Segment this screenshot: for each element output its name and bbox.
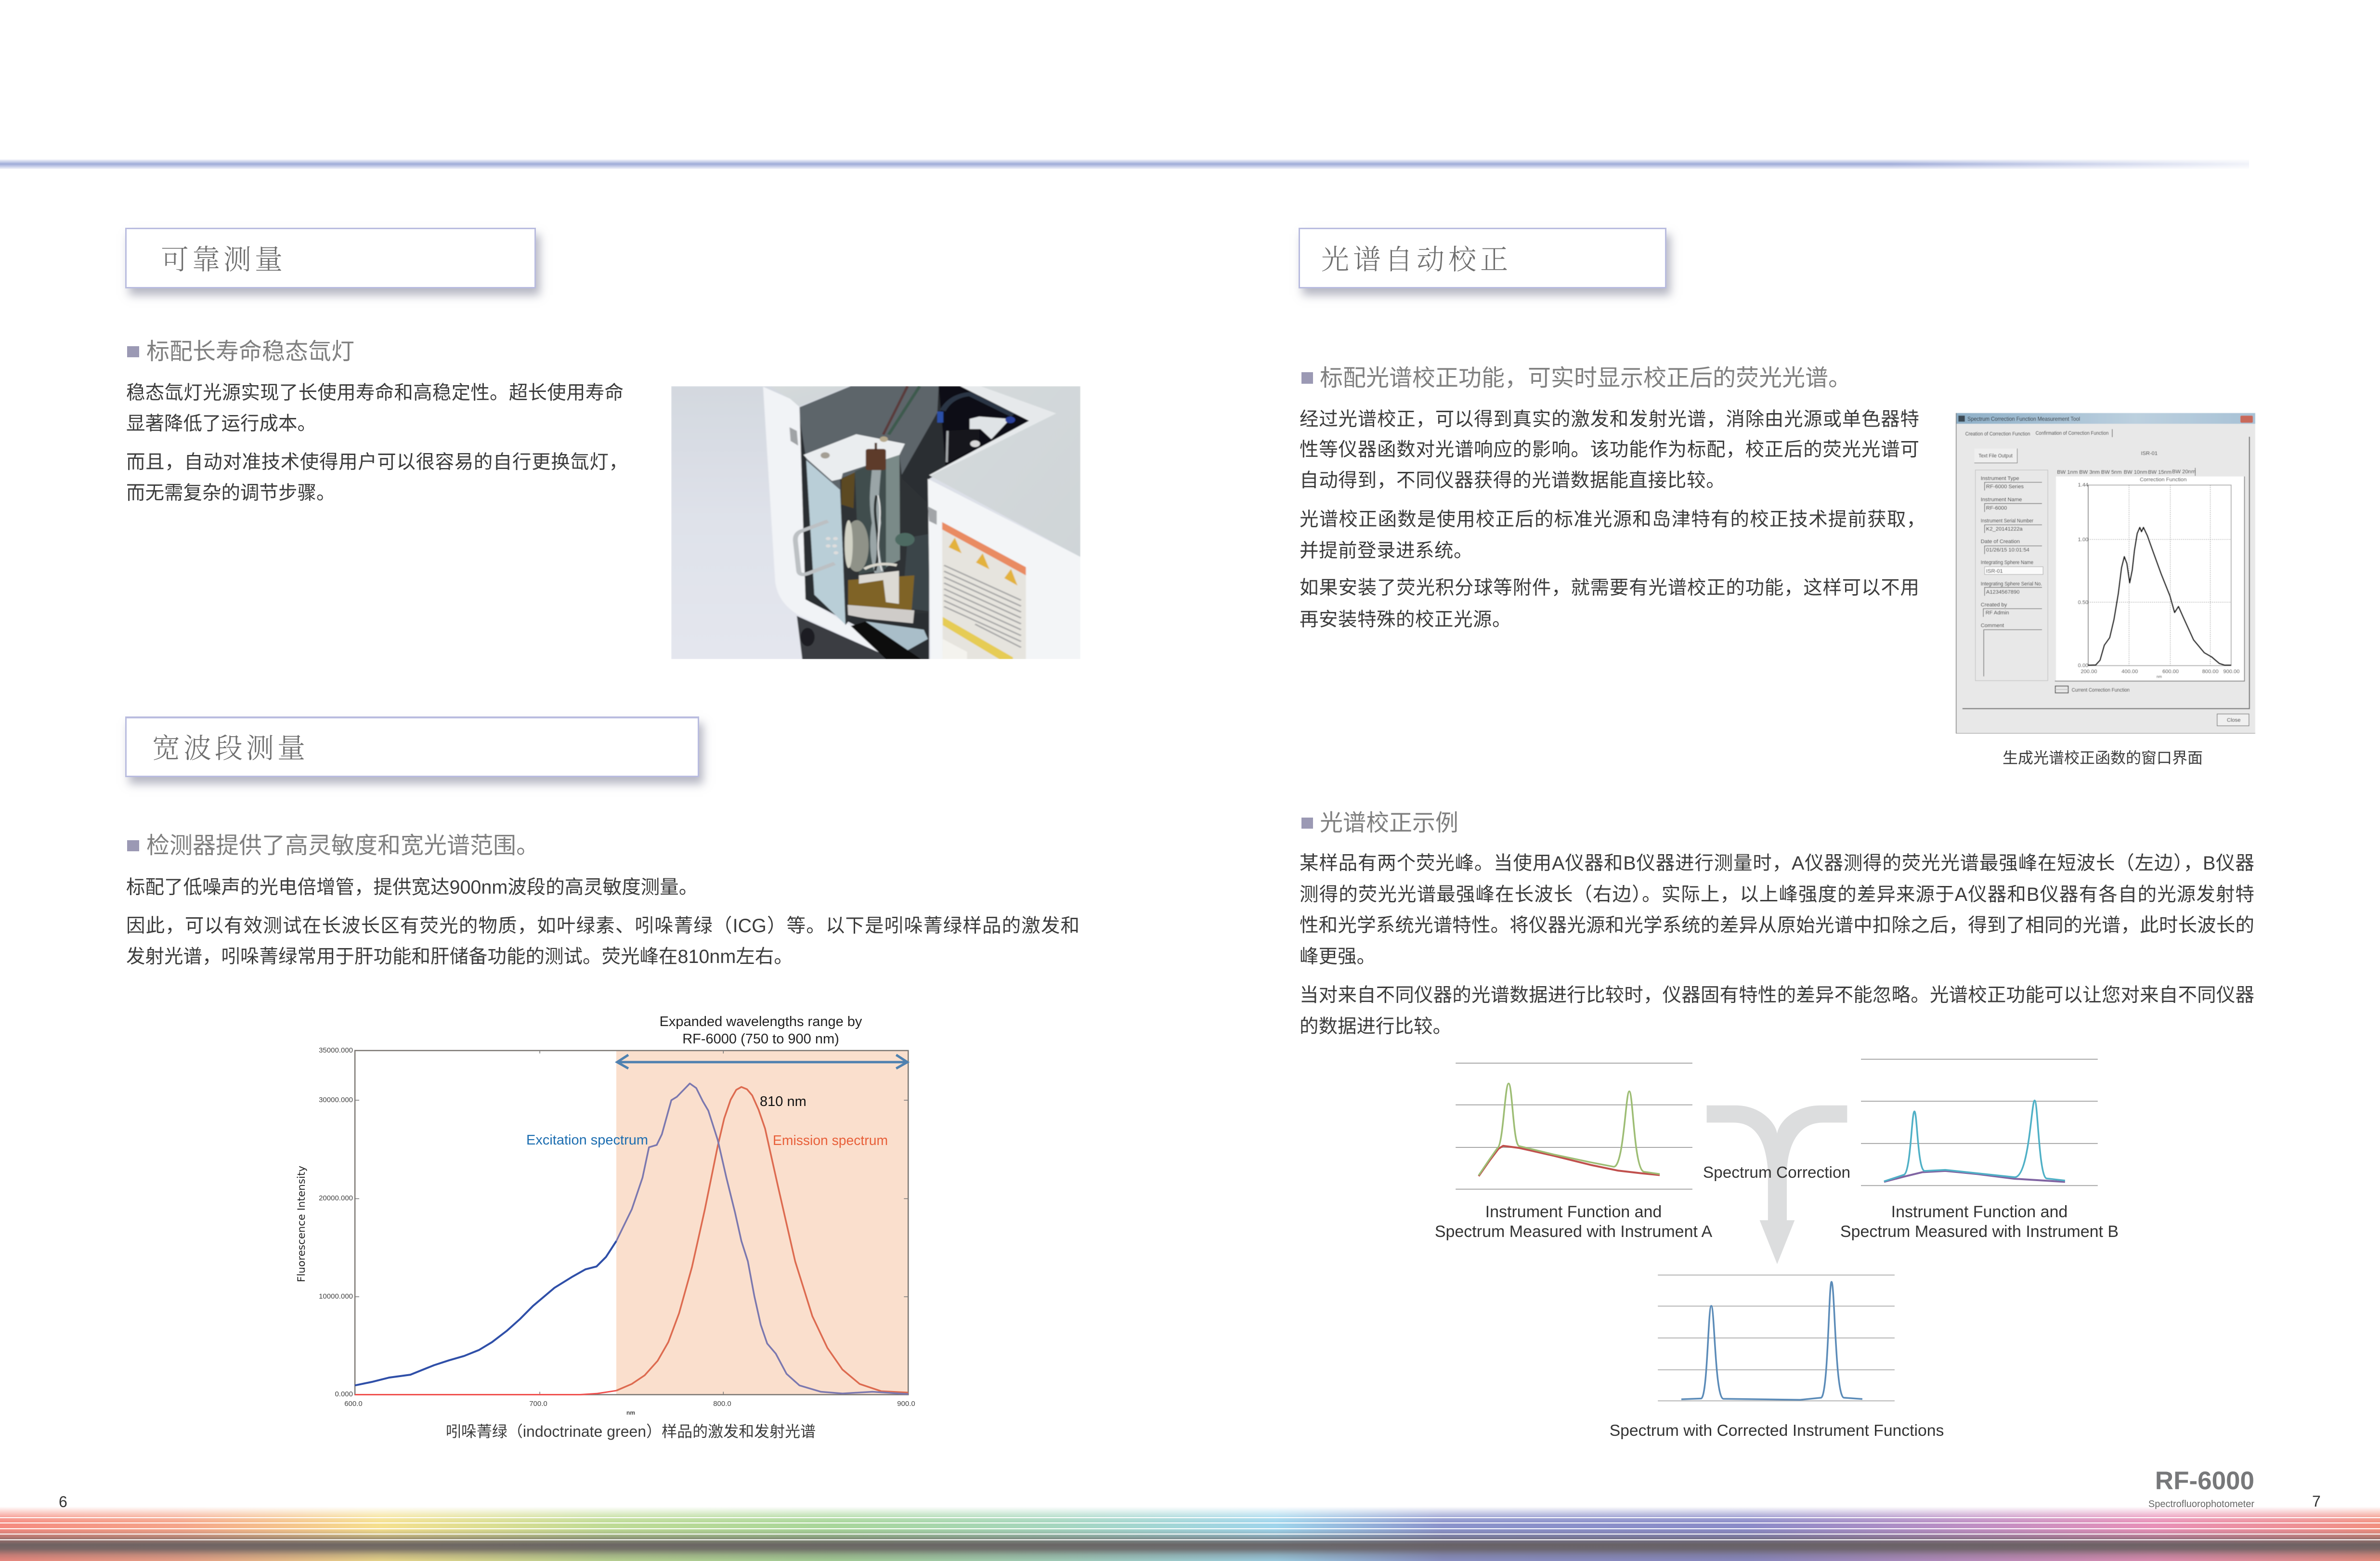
screenshot: correction function window: ISR-01 — [2141, 451, 2158, 456]
screenshot: correction function window: RF-6000 — [1986, 505, 2007, 511]
caption: instrument A: Spectrum Measured with Instrument A — [1435, 1223, 1712, 1241]
screenshot: correction function window: 200.00 — [2081, 669, 2097, 675]
body text: detector: 发射光谱，吲哚菁绿常用于肝功能和肝储备功能的测试。荧光峰在810nm左右。 — [126, 946, 793, 967]
bullet square — [1301, 372, 1313, 384]
body text: xenon lamp: 而且，自动对准技术使得用户可以很容易的自行更换氙灯， — [126, 452, 628, 473]
body text: spectrum correction: 如果安装了荧光积分球等附件，就需要有光谱校正的功能，这样可以不用 — [1300, 577, 1919, 598]
screenshot: correction function window: Text File Output — [1978, 453, 2013, 459]
screenshot: correction function window: Instrument Name — [1981, 497, 2022, 503]
body text: spectrum correction: 再安装特殊的校正光源。 — [1300, 609, 1511, 630]
panel: wide wavelength measurement — [125, 716, 1081, 1454]
screenshot caption: 生成光谱校正函数的窗口界面 — [2003, 749, 2203, 767]
screenshot: correction function window: 600.00 — [2162, 669, 2179, 675]
heading: automatic spectrum correction: 光谱自动校正 — [1321, 244, 1512, 275]
label: 810 nm peak: 810 nm — [760, 1094, 806, 1109]
label: emission spectrum: Emission spectrum — [773, 1132, 888, 1148]
warning label — [942, 522, 1026, 659]
screenshot: correction function window: 01/26/15 10:01:54 — [1986, 547, 2029, 553]
body text: spectrum correction — [1300, 410, 1925, 629]
y axis tick labels: 30000.000 — [319, 1096, 353, 1104]
body text: spectrum correction: 光谱校正函数是使用校正后的标准光源和岛津特有的校正技术提前获取， — [1300, 509, 1925, 530]
bullet square — [127, 840, 139, 851]
body text: correction example: 性和光学系统光谱特性。将仪器光源和光学系统的差异从原始光谱中扣除之后，得到了相同的光谱，此时长波长的 — [1300, 915, 2254, 936]
header gradient band — [0, 159, 2249, 169]
caption: instrument A: Instrument Function and — [1485, 1203, 1662, 1221]
chart: corrected spectrum — [1658, 1275, 1895, 1401]
screenshot: correction function window — [1936, 404, 2273, 741]
panel: reliable measurement — [125, 228, 1081, 661]
screenshot: correction function window: BW 20nm — [2172, 469, 2196, 475]
heading box: automatic spectrum correction — [1299, 228, 1666, 288]
body text: xenon lamp: 显著降低了运行成本。 — [126, 413, 316, 434]
caption: instrument B: Spectrum Measured with Instrument B — [1840, 1223, 2119, 1241]
subheading: xenon lamp: 标配长寿命稳态氙灯 — [146, 339, 354, 364]
screenshot: correction function window: BW 3nm — [2079, 469, 2100, 475]
screenshot: correction function window: BW 15nm — [2148, 469, 2172, 475]
body text: xenon lamp: 稳态氙灯光源实现了长使用寿命和高稳定性。超长使用寿命 — [126, 382, 624, 403]
screenshot: correction function window: nm — [2157, 675, 2162, 679]
screenshot: correction function window: Integrating Sphere Name — [1981, 560, 2033, 566]
x axis tick labels: 800.0 — [713, 1400, 731, 1408]
page number 6: 6 — [59, 1493, 67, 1510]
screenshot: correction function window: 0.50 — [2078, 599, 2088, 605]
x axis tick labels: 900.0 — [897, 1400, 915, 1408]
bullet square — [1301, 818, 1313, 829]
chart: ICG excitation and emission spectra — [279, 1002, 953, 1454]
y axis tick labels: 35000.000 — [319, 1046, 353, 1054]
panel: automatic spectrum correction — [1299, 228, 2273, 772]
chart header: expanded wavelength range: RF-6000 (750 to 900 nm) — [682, 1031, 839, 1047]
screenshot: correction function window: 1.44 — [2078, 482, 2088, 488]
screenshot: correction function window: 900.00 — [2223, 669, 2239, 675]
screenshot: correction function window: Creation of Correction Function — [1965, 431, 2030, 437]
caption: instrument B: Instrument Function and — [1891, 1203, 2068, 1221]
screenshot: correction function window: Confirmation of Correction Function — [2036, 430, 2108, 436]
body text: detector: 标配了低噪声的光电倍增管，提供宽达900nm波段的高灵敏度测量。 — [126, 877, 698, 898]
body text: spectrum correction: 性等仪器函数对光谱响应的影响。该功能作为标配，校正后的荧光光谱可 — [1300, 439, 1919, 460]
inner lamp area — [840, 455, 929, 625]
body text: correction example — [1300, 854, 2254, 1036]
right body — [928, 479, 1080, 659]
body text: detector: 因此，可以有效测试在长波长区有荧光的物质，如叶绿素、吲哚菁绿（ICG）等。以下是吲哚菁绿样品的激发和 — [126, 915, 1079, 937]
lower tray — [866, 622, 928, 652]
chart header: expanded wavelength range: Expanded wavelengths range by — [660, 1014, 862, 1029]
xenon lamp glass — [874, 469, 879, 572]
screenshot: correction function window: BW 10nm — [2124, 469, 2147, 475]
subheading: real-time corrected spectra: 标配光谱校正功能，可实时显示校正后的荧光光谱。 — [1320, 365, 1851, 391]
right lid — [931, 386, 1080, 557]
screenshot: correction function window: Current Correction Function — [2072, 687, 2130, 693]
photo: xenon lamp housing — [671, 386, 1080, 659]
screenshot: correction function window: 400.00 — [2121, 669, 2138, 675]
footer rainbow band — [0, 1507, 2380, 1561]
label: spectrum correction: Spectrum Correction — [1703, 1164, 1850, 1182]
x axis tick labels: 700.0 — [529, 1400, 547, 1408]
body text: correction example: 某样品有两个荧光峰。当使用A仪器和B仪器进行测量时，A仪器测得的荧光光谱最强峰在短波长（左边），B仪器 — [1300, 853, 2254, 874]
x axis tick labels: nm — [626, 1409, 635, 1416]
screenshot: correction function window: Instrument Type — [1981, 476, 2019, 481]
y axis tick labels: 0.000 — [335, 1390, 353, 1398]
chart: instrument A spectrum — [1456, 1063, 1692, 1189]
screenshot: correction function window: Instrument Serial Number — [1981, 518, 2033, 524]
screenshot: correction function window: 800.00 — [2202, 669, 2219, 675]
heading: wide wavelength measurement: 宽波段测量 — [152, 733, 309, 764]
caption: instrument A — [1429, 1202, 1718, 1242]
lamp blue plate — [806, 460, 846, 625]
heading box: reliable measurement — [125, 228, 536, 288]
screenshot: correction function window: RF Admin — [1986, 610, 2009, 616]
y axis tick labels: 10000.000 — [319, 1292, 353, 1301]
screenshot: correction function window: BW 1nm — [2057, 469, 2078, 475]
x axis tick labels: 600.0 — [344, 1400, 363, 1408]
x axis tick labels — [339, 1400, 915, 1416]
heading box: wide wavelength measurement — [125, 716, 699, 777]
handle — [795, 521, 834, 574]
body text: spectrum correction: 并提前登录进系统。 — [1300, 540, 1473, 561]
y axis tick labels: 20000.000 — [319, 1194, 353, 1202]
body text: spectrum correction: 自动得到，不同仪器获得的光谱数据能直接比较。 — [1300, 470, 1725, 491]
screenshot: correction function window: Close — [2227, 717, 2240, 723]
body text: xenon lamp — [126, 383, 624, 503]
bullet square — [127, 346, 139, 357]
body text: detector — [126, 878, 1079, 966]
top plate — [804, 434, 905, 481]
body text: correction example: 测得的荧光光谱最强峰在长波长（右边）。实际上，以上峰强度的差异来源于A仪器和B仪器有各自的光源发射特 — [1300, 884, 2254, 905]
product type: Spectrofluorophotometer — [2148, 1499, 2254, 1509]
chart header: expanded wavelength range — [616, 1013, 905, 1048]
heading: reliable measurement: 可靠测量 — [161, 244, 286, 275]
body text: correction example: 当对来自不同仪器的光谱数据进行比较时，仪器固有特性的差异不能忽略。光谱校正功能可以让您对来自不同仪器 — [1300, 985, 2254, 1006]
gold base — [848, 575, 914, 611]
label: excitation spectrum: Excitation spectrum — [526, 1132, 648, 1148]
chart caption: 吲哚菁绿（indoctrinate green）样品的激发和发射光谱 — [446, 1423, 816, 1440]
screenshot: correction function window: K2_20141222a — [1986, 526, 2023, 532]
y axis tick labels — [303, 1047, 353, 1398]
screenshot: correction function window: RF-6000 Series — [1986, 484, 2024, 490]
screenshot: correction function window: Created by — [1981, 602, 2007, 608]
page number 7: 7 — [2312, 1493, 2321, 1510]
body text: correction example: 的数据进行比较。 — [1300, 1016, 1452, 1037]
screenshot: correction function window: Comment — [1981, 623, 2004, 629]
screenshot: correction function window: 1.00 — [2078, 537, 2088, 543]
body text: xenon lamp: 而无需复杂的调节步骤。 — [126, 482, 335, 504]
product name: RF-6000 — [2155, 1467, 2254, 1495]
screenshot: correction function window: A1234567890 — [1986, 589, 2019, 595]
screenshot: correction function window: ISR-01 — [1986, 569, 2003, 574]
subheading: correction example: 光谱校正示例 — [1320, 810, 1458, 836]
diagram: spectrum correction flow — [1416, 1045, 2138, 1454]
top lid left — [771, 386, 848, 407]
caption: instrument B — [1835, 1202, 2124, 1242]
body text: correction example: 峰更强。 — [1300, 946, 1376, 967]
chart: instrument B spectrum — [1861, 1059, 2098, 1185]
lower black strip — [797, 616, 894, 659]
screenshot: correction function window: Date of Creation — [1981, 539, 2020, 545]
subheading: detector: 检测器提供了高灵敏度和宽光谱范围。 — [146, 833, 539, 859]
y axis title: Fluorescence Intensity — [296, 1166, 308, 1282]
screenshot: correction function window: 0.00 — [2078, 663, 2088, 669]
caption: corrected spectrum: Spectrum with Corrected Instrument Functions — [1610, 1421, 1944, 1440]
arrow: merging correction arrow — [1707, 1106, 1847, 1264]
screenshot: correction function window: BW 5nm — [2101, 469, 2122, 475]
panel: spectrum correction example — [1299, 809, 2262, 1454]
screenshot: correction function window: Correction Function — [2140, 477, 2186, 482]
screenshot: correction function window: Spectrum Correction Function Measurement Tool — [1967, 416, 2080, 422]
body text: spectrum correction: 经过光谱校正，可以得到真实的激发和发射光谱，消除由光源或单色器特 — [1300, 409, 1919, 430]
screenshot: correction function window: Integrating Sphere Serial No. — [1981, 581, 2042, 587]
